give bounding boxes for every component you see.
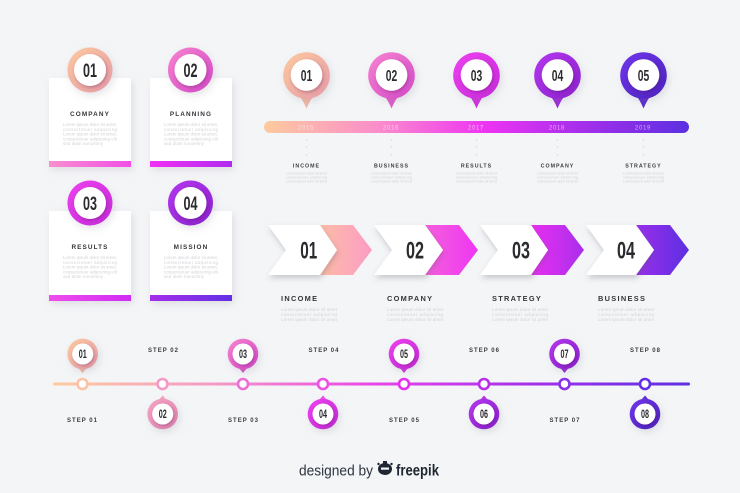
label: STEP 07 — [550, 418, 580, 424]
arrow step 02 company: 02 — [406, 238, 424, 265]
body text: Lorem ipsum dolor sit amet, — [63, 255, 117, 260]
description: Lorem ipsum dolor sit amet — [456, 172, 497, 176]
step 03 pin and label — [228, 339, 259, 424]
step 04 pin and label — [308, 348, 339, 429]
pin: 05 — [400, 349, 408, 361]
description: Lorem ipsum dolor sit amet — [456, 180, 497, 184]
description — [387, 307, 444, 322]
title strategy: STRATEGY — [492, 294, 542, 303]
description: Lorem ipsum dolor sit amet — [387, 317, 444, 322]
arrow step 01 income: 01 — [300, 238, 317, 265]
body text: Lorem ipsum dolor sit amet, — [164, 255, 218, 260]
body text: Lorem ipsum dolor sit amet, — [63, 132, 117, 136]
year timeline bar: 2019 — [635, 125, 651, 131]
year timeline bar: 2017 — [468, 125, 484, 131]
connector dots — [476, 139, 477, 156]
title income: INCOME — [281, 294, 318, 303]
connector dots — [643, 139, 644, 156]
body text: consectetuer adipiscing elit — [63, 136, 118, 142]
description: consectetuer adipiscing — [281, 312, 338, 317]
arrow step 01 income — [268, 225, 372, 322]
body text: Lorem ipsum dolor sit amet, — [164, 132, 218, 136]
label: STEP 01 — [67, 418, 98, 424]
label: STEP 05 — [389, 418, 420, 424]
description — [598, 307, 655, 322]
description — [286, 172, 327, 184]
pin: 07 — [560, 349, 568, 361]
body text — [63, 255, 118, 279]
description — [371, 172, 412, 184]
pin: 01 — [79, 349, 87, 361]
step timeline line with nodes — [53, 379, 690, 389]
description: Lorem ipsum dolor sit amet — [598, 317, 655, 322]
description — [492, 307, 549, 322]
heading: results: RESULTS — [71, 244, 109, 251]
timeline item 04 company — [534, 52, 581, 184]
description: Lorem ipsum dolor sit amet — [286, 172, 327, 176]
timeline item 05 strategy — [620, 52, 667, 184]
pin: 02 — [159, 409, 167, 421]
badge 03: 03 — [83, 194, 97, 215]
step 01 pin and label — [67, 339, 98, 424]
body text: sed diam nonummy — [164, 141, 205, 146]
label company: COMPANY — [541, 164, 574, 170]
pin: 06 — [480, 409, 488, 421]
step 08 pin and label — [630, 348, 661, 429]
body text: Lorem ipsum dolor sit amet, — [63, 264, 117, 270]
description — [537, 172, 578, 184]
arrow step 03 strategy — [480, 225, 584, 322]
body text: Lorem ipsum dolor sit amet, — [63, 122, 117, 127]
year timeline bar: 2016 — [383, 125, 399, 131]
year timeline bar — [264, 121, 689, 133]
description: Lorem ipsum dolor sit amet — [387, 307, 444, 312]
heading: mission: MISSION — [174, 244, 208, 251]
step 02 pin and label — [147, 348, 179, 429]
card: 02 planning — [150, 48, 232, 167]
body text: consectetuer adipiscing — [63, 127, 118, 132]
label: STEP 02 — [148, 348, 179, 354]
pin 01: 01 — [301, 68, 312, 85]
description: consectetuer adipiscing — [537, 176, 578, 180]
connector dots — [391, 139, 392, 156]
connector dots — [306, 139, 307, 156]
heading: company: COMPANY — [70, 111, 110, 118]
body text: Lorem ipsum dolor sit amet, — [164, 122, 218, 127]
year timeline bar: 2015 — [298, 125, 314, 131]
arrow step 04 business: 04 — [617, 238, 635, 265]
description: Lorem ipsum dolor sit amet — [623, 180, 664, 184]
label results: RESULTS — [461, 164, 492, 170]
pin 04: 04 — [552, 68, 563, 85]
label: STEP 04 — [309, 348, 339, 354]
description: consectetuer adipiscing — [286, 176, 327, 180]
year timeline bar: 2018 — [549, 125, 565, 131]
badge 04: 04 — [184, 194, 198, 215]
label income: INCOME — [293, 164, 320, 170]
description: consectetuer adipiscing — [598, 312, 655, 317]
pin 03: 03 — [471, 68, 482, 85]
body text: consectetuer adipiscing — [164, 127, 219, 132]
body text: consectetuer adipiscing elit — [164, 270, 219, 274]
body text: consectetuer adipiscing elit — [164, 136, 219, 142]
step 07 pin and label — [549, 339, 580, 424]
description: Lorem ipsum dolor sit amet — [623, 172, 664, 176]
description: Lorem ipsum dolor sit amet — [371, 180, 412, 184]
description: Lorem ipsum dolor sit amet — [537, 180, 578, 184]
body text — [164, 255, 219, 279]
pin 02: 02 — [386, 68, 397, 85]
description: Lorem ipsum dolor sit amet — [286, 180, 327, 184]
label business: BUSINESS — [374, 164, 409, 170]
description: Lorem ipsum dolor sit amet — [598, 307, 655, 312]
description: consectetuer adipiscing — [371, 176, 412, 180]
label: STEP 06 — [469, 348, 500, 354]
card: 03 results — [49, 180, 131, 301]
timeline item 02 business — [368, 52, 415, 184]
connector dots — [557, 139, 558, 156]
arrow step 03 strategy: 03 — [512, 238, 530, 265]
body text: consectetuer adipiscing — [63, 260, 118, 265]
heading: planning: PLANNING — [170, 111, 212, 118]
pin 05: 05 — [638, 68, 649, 85]
pin: 08 — [641, 409, 649, 421]
title company: COMPANY — [387, 294, 433, 303]
body text: Lorem ipsum dolor sit amet, — [164, 264, 218, 270]
body text: sed diam nonummy — [63, 141, 104, 146]
description: Lorem ipsum dolor sit amet — [492, 307, 549, 312]
pin: 04 — [319, 409, 327, 421]
body text: sed diam nonummy — [63, 274, 104, 279]
card: 04 mission — [150, 180, 232, 301]
badge 02: 02 — [184, 61, 198, 82]
description: consectetuer adipiscing — [387, 312, 444, 317]
label strategy: STRATEGY — [625, 164, 662, 170]
card: 01 company — [49, 48, 131, 167]
description: consectetuer adipiscing — [456, 176, 497, 180]
timeline item 01 income — [283, 52, 330, 184]
description — [456, 172, 497, 184]
label: STEP 08 — [630, 348, 661, 354]
description: Lorem ipsum dolor sit amet — [281, 317, 338, 322]
body text: consectetuer adipiscing elit — [63, 270, 118, 274]
timeline item 03 results — [453, 52, 500, 184]
description — [281, 307, 338, 322]
freepik credit: designed by — [299, 464, 374, 480]
pin: 03 — [239, 349, 247, 361]
description: consectetuer adipiscing — [492, 312, 549, 317]
description: Lorem ipsum dolor sit amet — [281, 307, 338, 312]
step 06 pin and label — [469, 348, 500, 429]
body text — [164, 122, 219, 146]
badge 01: 01 — [83, 61, 97, 82]
label: STEP 03 — [228, 418, 259, 424]
icon: freepik mascot — [377, 461, 393, 475]
description: consectetuer adipiscing — [623, 176, 664, 180]
body text: sed diam nonummy — [164, 274, 205, 279]
description: Lorem ipsum dolor sit amet — [492, 317, 549, 322]
freepik credit — [299, 461, 439, 480]
body text — [63, 122, 118, 146]
description: Lorem ipsum dolor sit amet — [537, 172, 578, 176]
body text: consectetuer adipiscing — [164, 260, 219, 265]
description — [623, 172, 664, 184]
title business: BUSINESS — [598, 294, 646, 303]
step 05 pin and label — [389, 339, 420, 424]
arrow step 04 business — [586, 225, 689, 322]
description: Lorem ipsum dolor sit amet — [371, 172, 412, 176]
freepik credit: freepik — [396, 462, 439, 480]
arrow step 02 company — [374, 225, 478, 322]
